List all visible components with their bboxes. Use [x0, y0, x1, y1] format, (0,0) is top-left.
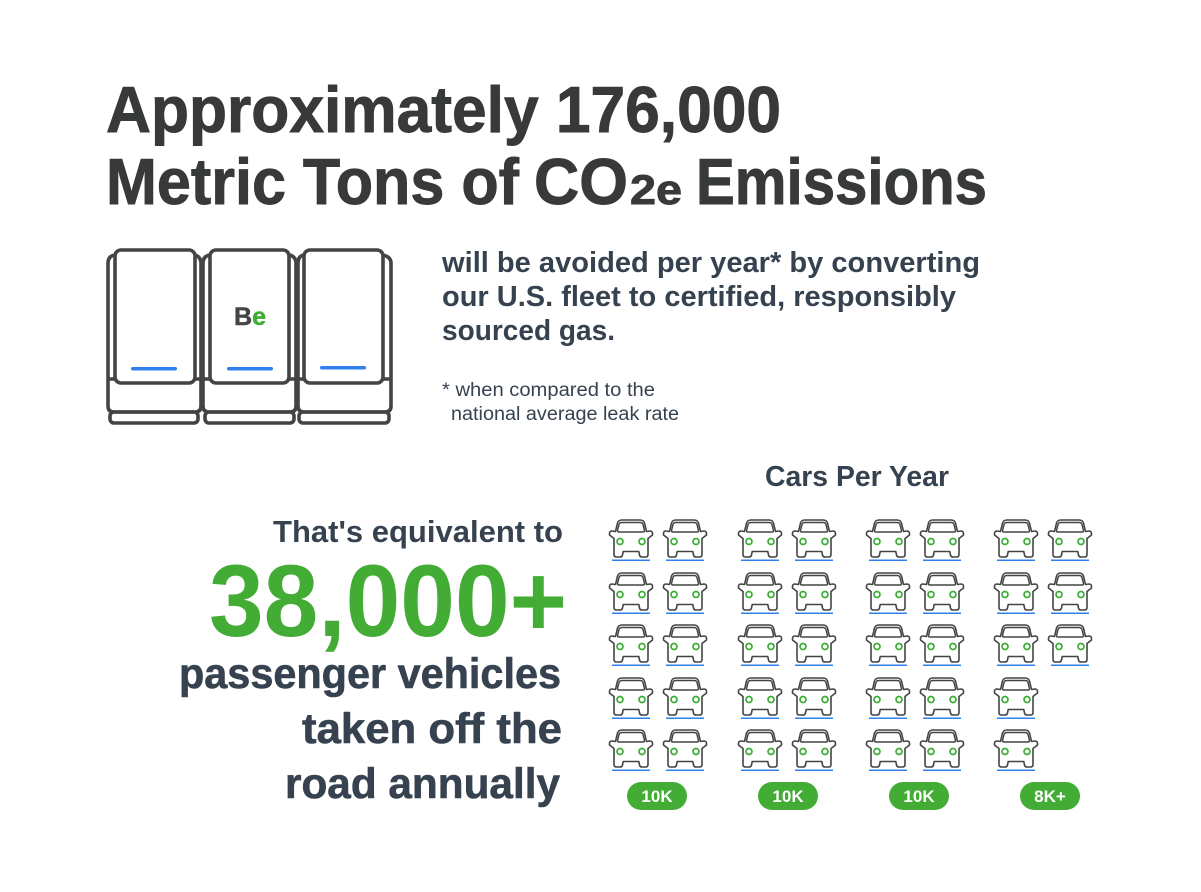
lead-in text: That's equivalent to	[273, 514, 563, 549]
column three: 10K cars	[866, 520, 964, 810]
title: Approximately 176,000	[106, 73, 781, 146]
vehicles text: taken off the	[302, 705, 562, 753]
vehicles text: passenger vehicles	[179, 650, 561, 698]
column one: 10K cars: 10K	[641, 787, 673, 806]
body text: avoided emissions: will be avoided per year* by converting	[441, 247, 980, 279]
column four: 8K+ cars: 8K+	[1034, 787, 1066, 806]
body text: avoided emissions: sourced gas.	[442, 315, 615, 347]
title: CO	[534, 145, 628, 218]
chart heading: Cars Per Year	[765, 461, 949, 493]
title: Emissions	[696, 145, 987, 218]
icon: row of three seats	[108, 250, 391, 423]
big number: 38,000+	[209, 544, 567, 658]
seat two	[203, 250, 296, 423]
title	[106, 73, 987, 218]
column one: 10K cars	[610, 520, 706, 810]
seat three	[298, 250, 391, 423]
title: Metric Tons of	[106, 145, 519, 218]
equivalence statement	[179, 514, 567, 808]
vehicles text: road annually	[285, 760, 560, 808]
footnote	[442, 380, 679, 425]
column two: 10K cars: 10K	[772, 787, 804, 806]
column two: 10K cars	[738, 520, 836, 810]
column four: 8K+ cars	[994, 520, 1092, 810]
seat one	[108, 250, 201, 423]
pictogram chart: cars per year	[610, 520, 1092, 810]
body text: avoided emissions	[441, 247, 980, 347]
vehicles text	[179, 650, 562, 808]
logo: Be: Be	[234, 303, 266, 331]
footnote: national average leak rate	[451, 404, 679, 425]
body text: avoided emissions: our U.S. fleet to certified, responsibly	[442, 281, 956, 313]
footnote: * when compared to the	[442, 380, 655, 401]
column three: 10K cars: 10K	[903, 787, 935, 806]
title: 2e	[630, 166, 682, 213]
